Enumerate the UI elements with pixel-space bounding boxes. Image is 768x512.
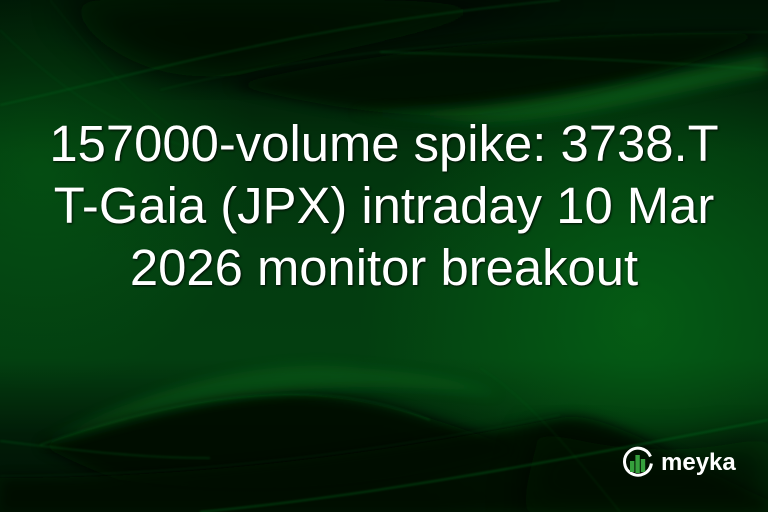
bright band glow <box>40 365 500 445</box>
title <box>49 115 720 296</box>
icon: ring with bars <box>625 448 651 475</box>
dark top swoosh <box>60 0 600 77</box>
dark upper-right lens <box>230 33 768 115</box>
logo: meyka <box>623 446 736 477</box>
dark bottom lens <box>40 394 520 488</box>
title: 2026 monitor breakout <box>130 239 638 296</box>
wordmark: meyka <box>661 449 736 476</box>
title: T-Gaia (JPX) intraday 10 Mar <box>54 177 714 234</box>
title: 157000-volume spike: 3738.T <box>49 115 719 172</box>
